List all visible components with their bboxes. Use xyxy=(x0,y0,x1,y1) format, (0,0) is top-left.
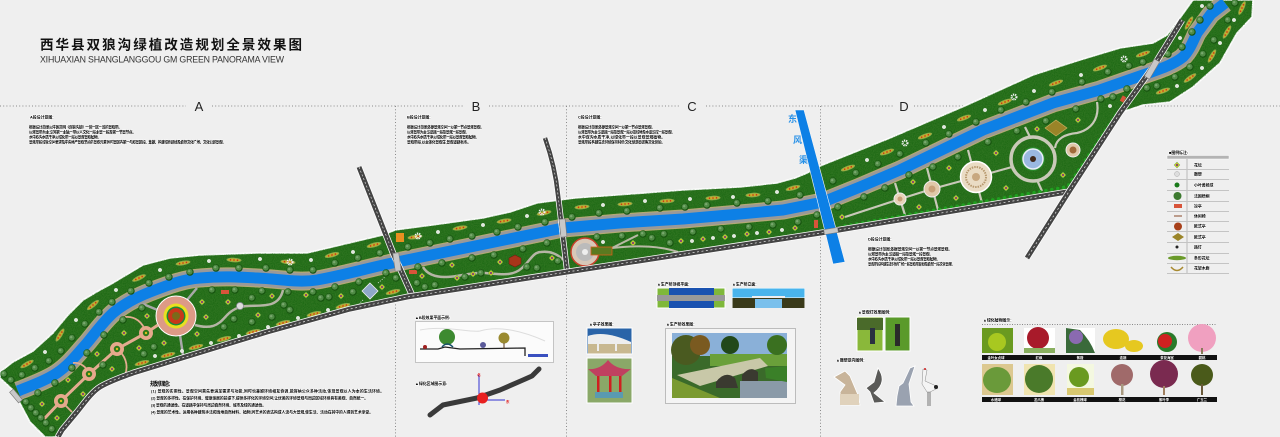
section letters xyxy=(195,99,909,114)
panel: bridge top view xyxy=(657,282,725,308)
legend labels: 休闲椅 xyxy=(1194,214,1206,218)
plant names row 2: 樱花 xyxy=(1119,397,1126,402)
text block: B section intent: 以观景带为主,沿道路一段及景观一段景观。 xyxy=(407,130,469,134)
panel: plant palette: ▲绿化植物图示: xyxy=(983,318,1012,322)
plant names row 2 xyxy=(982,397,1217,402)
text block: C section intent: 水中双沟水质干净,以绿化带一段以景观景观植物。 xyxy=(578,134,665,140)
panel: location map: ▲绿化区域图示意: xyxy=(415,381,447,386)
plant names row 1: 碧桃 xyxy=(1199,355,1206,360)
legend labels: 条形花坛 xyxy=(1194,256,1210,260)
main perimeter road xyxy=(58,192,1067,437)
paths to garden C xyxy=(612,235,678,252)
text block: D section intent: 水中双沟水质干净,以绿化带一段以景观景观植物。 xyxy=(868,256,940,262)
legend labels: 路灯 xyxy=(1194,244,1202,250)
photo: modern pavilion xyxy=(587,328,632,354)
plant names row 2: 水蜡球 xyxy=(991,397,1002,402)
panel: pavilion photos: ▲亭子效果图: xyxy=(589,322,614,326)
plant names row 1: 红枫 xyxy=(1036,355,1043,360)
legend labels: 法国梧桐 xyxy=(1194,194,1210,198)
text block: B section intent: 景观带段,以主体化景观生,景观道路秋冬。 xyxy=(407,140,471,144)
label A: A xyxy=(195,99,204,114)
title: chinese: 西华县双狼沟绿植改造规划全景效果图 xyxy=(40,36,302,52)
panel: plant palette xyxy=(982,318,1217,402)
plant names row 2: 龙爪槐 xyxy=(1034,397,1045,402)
bridges xyxy=(10,59,1160,403)
text block: planning concept: (2) 景观的多样性。在保护环境、健康发展的前提下,提供多样化的环境空间,让优美的环境景观与周边区域环境具有美观、自然统一。 xyxy=(151,396,368,400)
plant names row 1: 连翘 xyxy=(1120,355,1127,360)
plant row 2 xyxy=(982,360,1213,395)
road: middle cross street xyxy=(545,138,567,271)
plaza A xyxy=(143,288,197,355)
panel: location map: 东 xyxy=(506,399,510,404)
legend labels: 小叶黄杨球 xyxy=(1194,182,1214,188)
text block: D section intent: 景观带段,构建生态环境广场一段景观带路线及自然一段文化景观。 xyxy=(868,262,955,266)
white shrubs xyxy=(43,4,1236,358)
text block: A section intent: A段设计意图: xyxy=(30,114,54,120)
title: english: XIHUAXIAN SHANGLANGGOU GM GREEN PANORAMA VIEW xyxy=(40,54,285,64)
panel: light photos xyxy=(857,310,910,351)
promenade nodes xyxy=(54,326,153,408)
text block: D section intent xyxy=(868,236,955,266)
plant names row 2: 金枝槐球 xyxy=(1073,397,1087,402)
panel: section elevation xyxy=(415,315,554,362)
panel: bridge elevation xyxy=(732,282,805,308)
plaza sequence D xyxy=(845,102,1098,217)
text block: A section intent: 以观景带为主,沿河第一主轴一带以人文化一段主景一段及第一节景节点。 xyxy=(29,130,136,134)
text block: A section intent xyxy=(29,114,226,144)
panel: sculptures xyxy=(834,358,938,406)
panel: bridge photo: ▲生产桥效果图: xyxy=(666,322,694,326)
text block: B section intent: 根据设计范围,依据景观空间一以第一节点景观景观。 xyxy=(407,124,484,130)
text block: D section intent: D段设计意图: xyxy=(868,236,892,242)
legend labels xyxy=(1194,162,1214,270)
photo: red pavilion xyxy=(587,358,632,403)
fountain plaza xyxy=(1011,137,1055,181)
text block: planning concept: 规划理念 xyxy=(150,380,170,388)
text block: planning concept: (4) 景观的艺术性。运用各种建筑手法和当地自然材料、植物,同艺术的表达构成人流与大景观,使生活、活动在其中的人得到艺术享受。 xyxy=(151,410,373,414)
canal label xyxy=(788,113,808,165)
plant names row 1: 茶花海棠 xyxy=(1160,355,1174,360)
canal label: 渠 xyxy=(799,154,808,165)
panel: section elevation: ▲B段效果平面示例: xyxy=(415,315,450,320)
legend xyxy=(1167,150,1229,274)
panel: bridge photo xyxy=(666,322,796,404)
label B: B xyxy=(472,99,480,114)
panel: pavilion photos xyxy=(587,322,632,403)
sculpture: deer xyxy=(896,366,915,406)
panel: sculptures: ▲雕塑意向图例: xyxy=(836,358,864,362)
label D: D xyxy=(899,99,909,114)
compass sculpture xyxy=(355,277,385,308)
plant names row 1 xyxy=(982,355,1217,360)
legend icons xyxy=(1168,162,1186,270)
plant row 1 xyxy=(982,324,1216,354)
text block: D section intent: 根据设计范围,依据景观空间一以第一节点景观景观。 xyxy=(868,246,952,252)
canal label: 风 xyxy=(793,135,802,145)
text block: A section intent: 根据设计范围,以中国文明《双狼沟镇》一体一区一流的景观带。 xyxy=(29,124,122,130)
title xyxy=(40,36,302,64)
hedge dots xyxy=(845,112,1118,226)
pavilion B xyxy=(509,255,521,267)
text block: C section intent: C段设计意图: xyxy=(578,114,602,120)
text block: B section intent xyxy=(407,114,484,144)
text block: C section intent: 景观带段,构建生态环境保持特色,文化,使游览游客文化体验。 xyxy=(578,140,665,144)
text block: C section intent xyxy=(578,114,675,144)
canal label: 东 xyxy=(788,113,797,124)
text block: C section intent: 根据设计范围,依据景观空间一以第一节点景观景观。 xyxy=(578,124,655,130)
text block: planning concept: (1) 景观的实用性。景观空间首先要满足需求与功能,同时也兼顾环境相互协调,能容纳公众多种活动,体现景观以人为本的生活环境。 xyxy=(151,388,384,394)
legend: ■图例标注: xyxy=(1169,150,1188,155)
road: north-east avenue xyxy=(1027,20,1182,258)
salmon promenade xyxy=(44,317,158,419)
text block: B section intent: 水中双沟水质干净,以绿化带一段以景观景观植物。 xyxy=(407,134,479,140)
plant names row 2: 广玉兰 xyxy=(1197,397,1208,402)
gold pavilion xyxy=(1045,120,1067,136)
text block: B section intent: B段设计意图: xyxy=(407,114,431,120)
label C: C xyxy=(687,99,697,114)
sculpture: horse xyxy=(834,371,860,405)
garden C xyxy=(571,238,612,266)
text block: A section intent: 水中双沟水质干净,以绿化带一段以景观景观植物。 xyxy=(29,134,101,140)
panel: light photos: ▲景观灯效果图例: xyxy=(858,310,890,314)
plant names row 1: 金叶女贞球 xyxy=(988,355,1005,360)
panel: bridge elevation: ▲生产桥立面: xyxy=(732,282,757,286)
sculpture: crane xyxy=(922,368,938,406)
path node xyxy=(236,302,244,310)
text block: planning concept xyxy=(150,380,384,414)
winding path B xyxy=(423,252,563,277)
legend labels: 花架木廊 xyxy=(1194,266,1210,270)
section dividers xyxy=(0,106,1280,437)
flower plots xyxy=(39,117,1081,421)
text block: C section intent: 以观景带为主,沿道路一段及景观一段以及绿地及水道沿岸一段景观。 xyxy=(578,130,675,134)
panel: location map: 北 xyxy=(477,372,481,377)
side roads xyxy=(359,138,567,295)
legend labels: 雕塑 xyxy=(1194,172,1202,176)
legend labels: 欧式亭 xyxy=(1194,234,1206,240)
panel: location map xyxy=(415,369,539,415)
text block: D section intent: 以观景带为主,沿道路一段及景观一段景观。 xyxy=(868,252,933,256)
legend labels: 花坛 xyxy=(1194,162,1202,168)
plant names row 1: 紫薇 xyxy=(1077,355,1084,360)
winding path A xyxy=(195,290,283,327)
road: west cross street xyxy=(359,167,412,295)
text block: A section intent: 景观带段,绿化空间要求及中央地产景观节点的景观元素,同时景区内第一与双景区段、集散、构建绿色路线及自然文化广场、文化公园景观。 xyxy=(29,140,226,144)
plant names row 2: 紫叶李 xyxy=(1159,397,1170,402)
east wind canal xyxy=(795,110,845,264)
round plazas xyxy=(894,143,1080,205)
pergolas xyxy=(221,95,1126,294)
text block: planning concept: (3) 景观的通透性。在道路中保持与周边自然环境、城市及绿的通透性。 xyxy=(151,402,266,408)
white sculptures on lawn xyxy=(288,57,1126,264)
panel: bridge top view: ▲生产桥顶视平面: xyxy=(657,282,689,286)
sculpture: dolphins xyxy=(866,368,885,403)
legend labels: 凉亭 xyxy=(1194,204,1202,208)
legend labels: 欧式亭 xyxy=(1194,224,1206,228)
